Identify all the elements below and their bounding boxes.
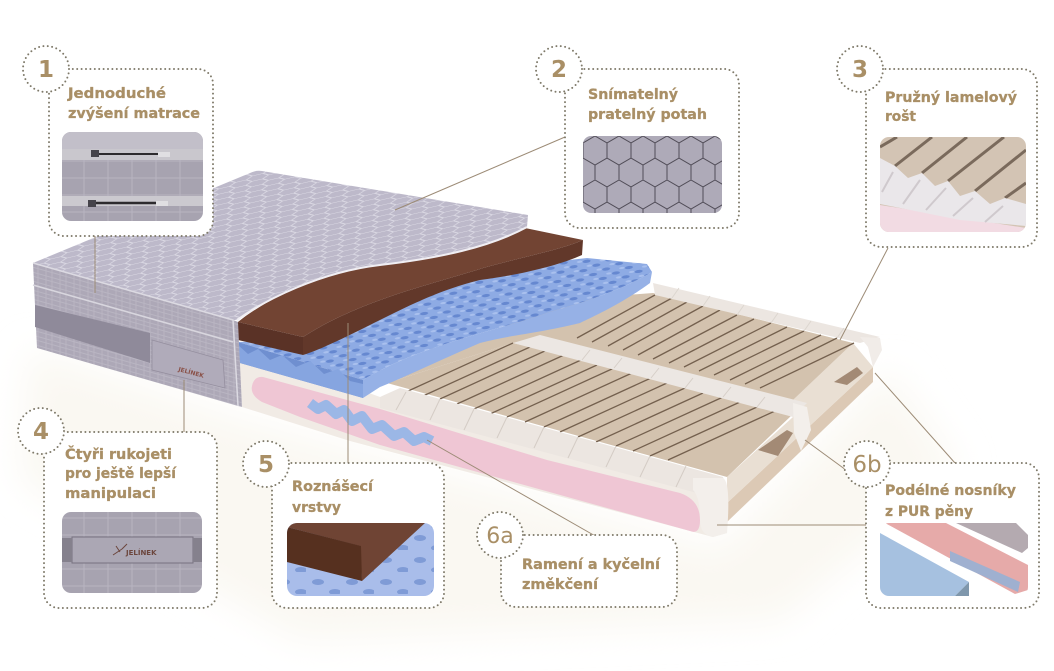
panel box — [866, 463, 1039, 608]
number badge 5: 5 — [258, 452, 274, 478]
frame body with pink beam — [238, 345, 727, 537]
middle foam strip — [513, 335, 807, 417]
foam top — [238, 258, 652, 380]
front strip separators — [396, 392, 686, 487]
slatted frame — [238, 283, 882, 537]
photo: foam beams — [880, 523, 1028, 596]
pink beam — [252, 377, 700, 532]
side seam — [33, 285, 233, 342]
middle end cap — [793, 403, 811, 451]
floor shadow — [20, 350, 960, 640]
foam front backing — [238, 342, 363, 398]
heading 2: Snímatelný — [588, 87, 679, 103]
side rail — [727, 367, 873, 522]
panel 6a: shoulder and hip softening — [477, 512, 677, 607]
heading 1: Jednoduché — [67, 86, 166, 102]
number badge 6b: 6b — [852, 452, 882, 478]
heading 3: Pružný lamelový — [885, 90, 1018, 106]
brown front — [238, 322, 303, 355]
heading 3: rošt — [885, 109, 916, 125]
heading 1: zvýšení matrace — [68, 106, 200, 122]
heading 4: Čtyři rukojeti — [65, 445, 172, 463]
back end cap — [860, 337, 882, 367]
back section hole — [834, 367, 863, 385]
photo: foam layers — [287, 523, 434, 596]
number badge 4 — [18, 408, 64, 454]
dark side band — [35, 305, 150, 363]
panel box — [501, 535, 677, 607]
foam side — [363, 272, 652, 398]
back slats — [540, 293, 853, 400]
back strip separators — [672, 288, 844, 338]
cover top — [33, 171, 528, 320]
brown top — [238, 228, 583, 337]
mattress cover — [33, 171, 528, 407]
blue wave insert — [310, 403, 432, 441]
handle — [152, 340, 225, 388]
front section hole — [758, 430, 793, 456]
panel 1: raising — [23, 46, 213, 236]
brown curved side — [303, 240, 583, 355]
panel box — [866, 69, 1037, 247]
photo: handle: JELÍNEK — [125, 548, 157, 557]
handle logo: JELÍNEK — [177, 365, 205, 380]
front slat gaps — [406, 343, 775, 460]
number badge 6b — [844, 441, 890, 487]
front end cap — [693, 478, 728, 537]
number badge 3: 3 — [852, 57, 868, 83]
front foam strip — [380, 388, 727, 493]
number badge 1 — [23, 46, 69, 92]
panel box — [44, 432, 217, 608]
photo: handle — [62, 512, 202, 593]
heading 4: manipulaci — [65, 486, 156, 502]
number badge 2 — [536, 46, 582, 92]
number badge 6a: 6a — [486, 524, 514, 549]
heading 6a: Ramení a kyčelní — [522, 557, 661, 573]
back slat gaps — [577, 295, 854, 388]
panel box — [272, 463, 444, 608]
panel 6b: longitudinal beams — [844, 441, 1039, 608]
blue foam layer — [238, 258, 652, 398]
photo: zippers — [62, 132, 203, 221]
heading 6b: z PUR pěny — [885, 504, 974, 520]
number badge 2: 2 — [551, 57, 567, 83]
photo: slats — [880, 137, 1026, 232]
foam front — [238, 345, 363, 398]
number badge 5 — [243, 441, 289, 487]
white cut edge — [237, 227, 527, 320]
frame interior — [727, 343, 873, 503]
heading 4: pro ještě lepší — [65, 466, 177, 482]
panel 2: washable cover — [536, 46, 739, 228]
front slats — [387, 343, 792, 477]
panel 5: load layers — [243, 441, 444, 608]
number badge 6a — [477, 512, 523, 558]
heading 6a: změkčení — [522, 577, 599, 593]
leader lines — [95, 137, 955, 537]
panel 4: handles — [18, 408, 217, 608]
top seam — [33, 263, 238, 406]
middle strip separators — [582, 350, 765, 407]
photo: cover fabric — [583, 136, 722, 213]
heading 6b: Podélné nosníky — [885, 483, 1017, 499]
panel 3: slatted base — [837, 46, 1037, 247]
number badge 4: 4 — [33, 419, 49, 445]
back foam strip — [653, 283, 880, 343]
wood under blue layer — [387, 293, 793, 400]
panel box — [565, 69, 739, 228]
panel box — [49, 69, 213, 236]
number badge 3 — [837, 46, 883, 92]
heading 5: vrstvy — [292, 500, 342, 516]
cover side — [33, 263, 242, 407]
number badge 1: 1 — [38, 57, 54, 83]
brown layer — [238, 228, 583, 355]
heading 5: Roznášecí — [292, 479, 374, 495]
heading 2: pratelný potah — [588, 107, 707, 123]
